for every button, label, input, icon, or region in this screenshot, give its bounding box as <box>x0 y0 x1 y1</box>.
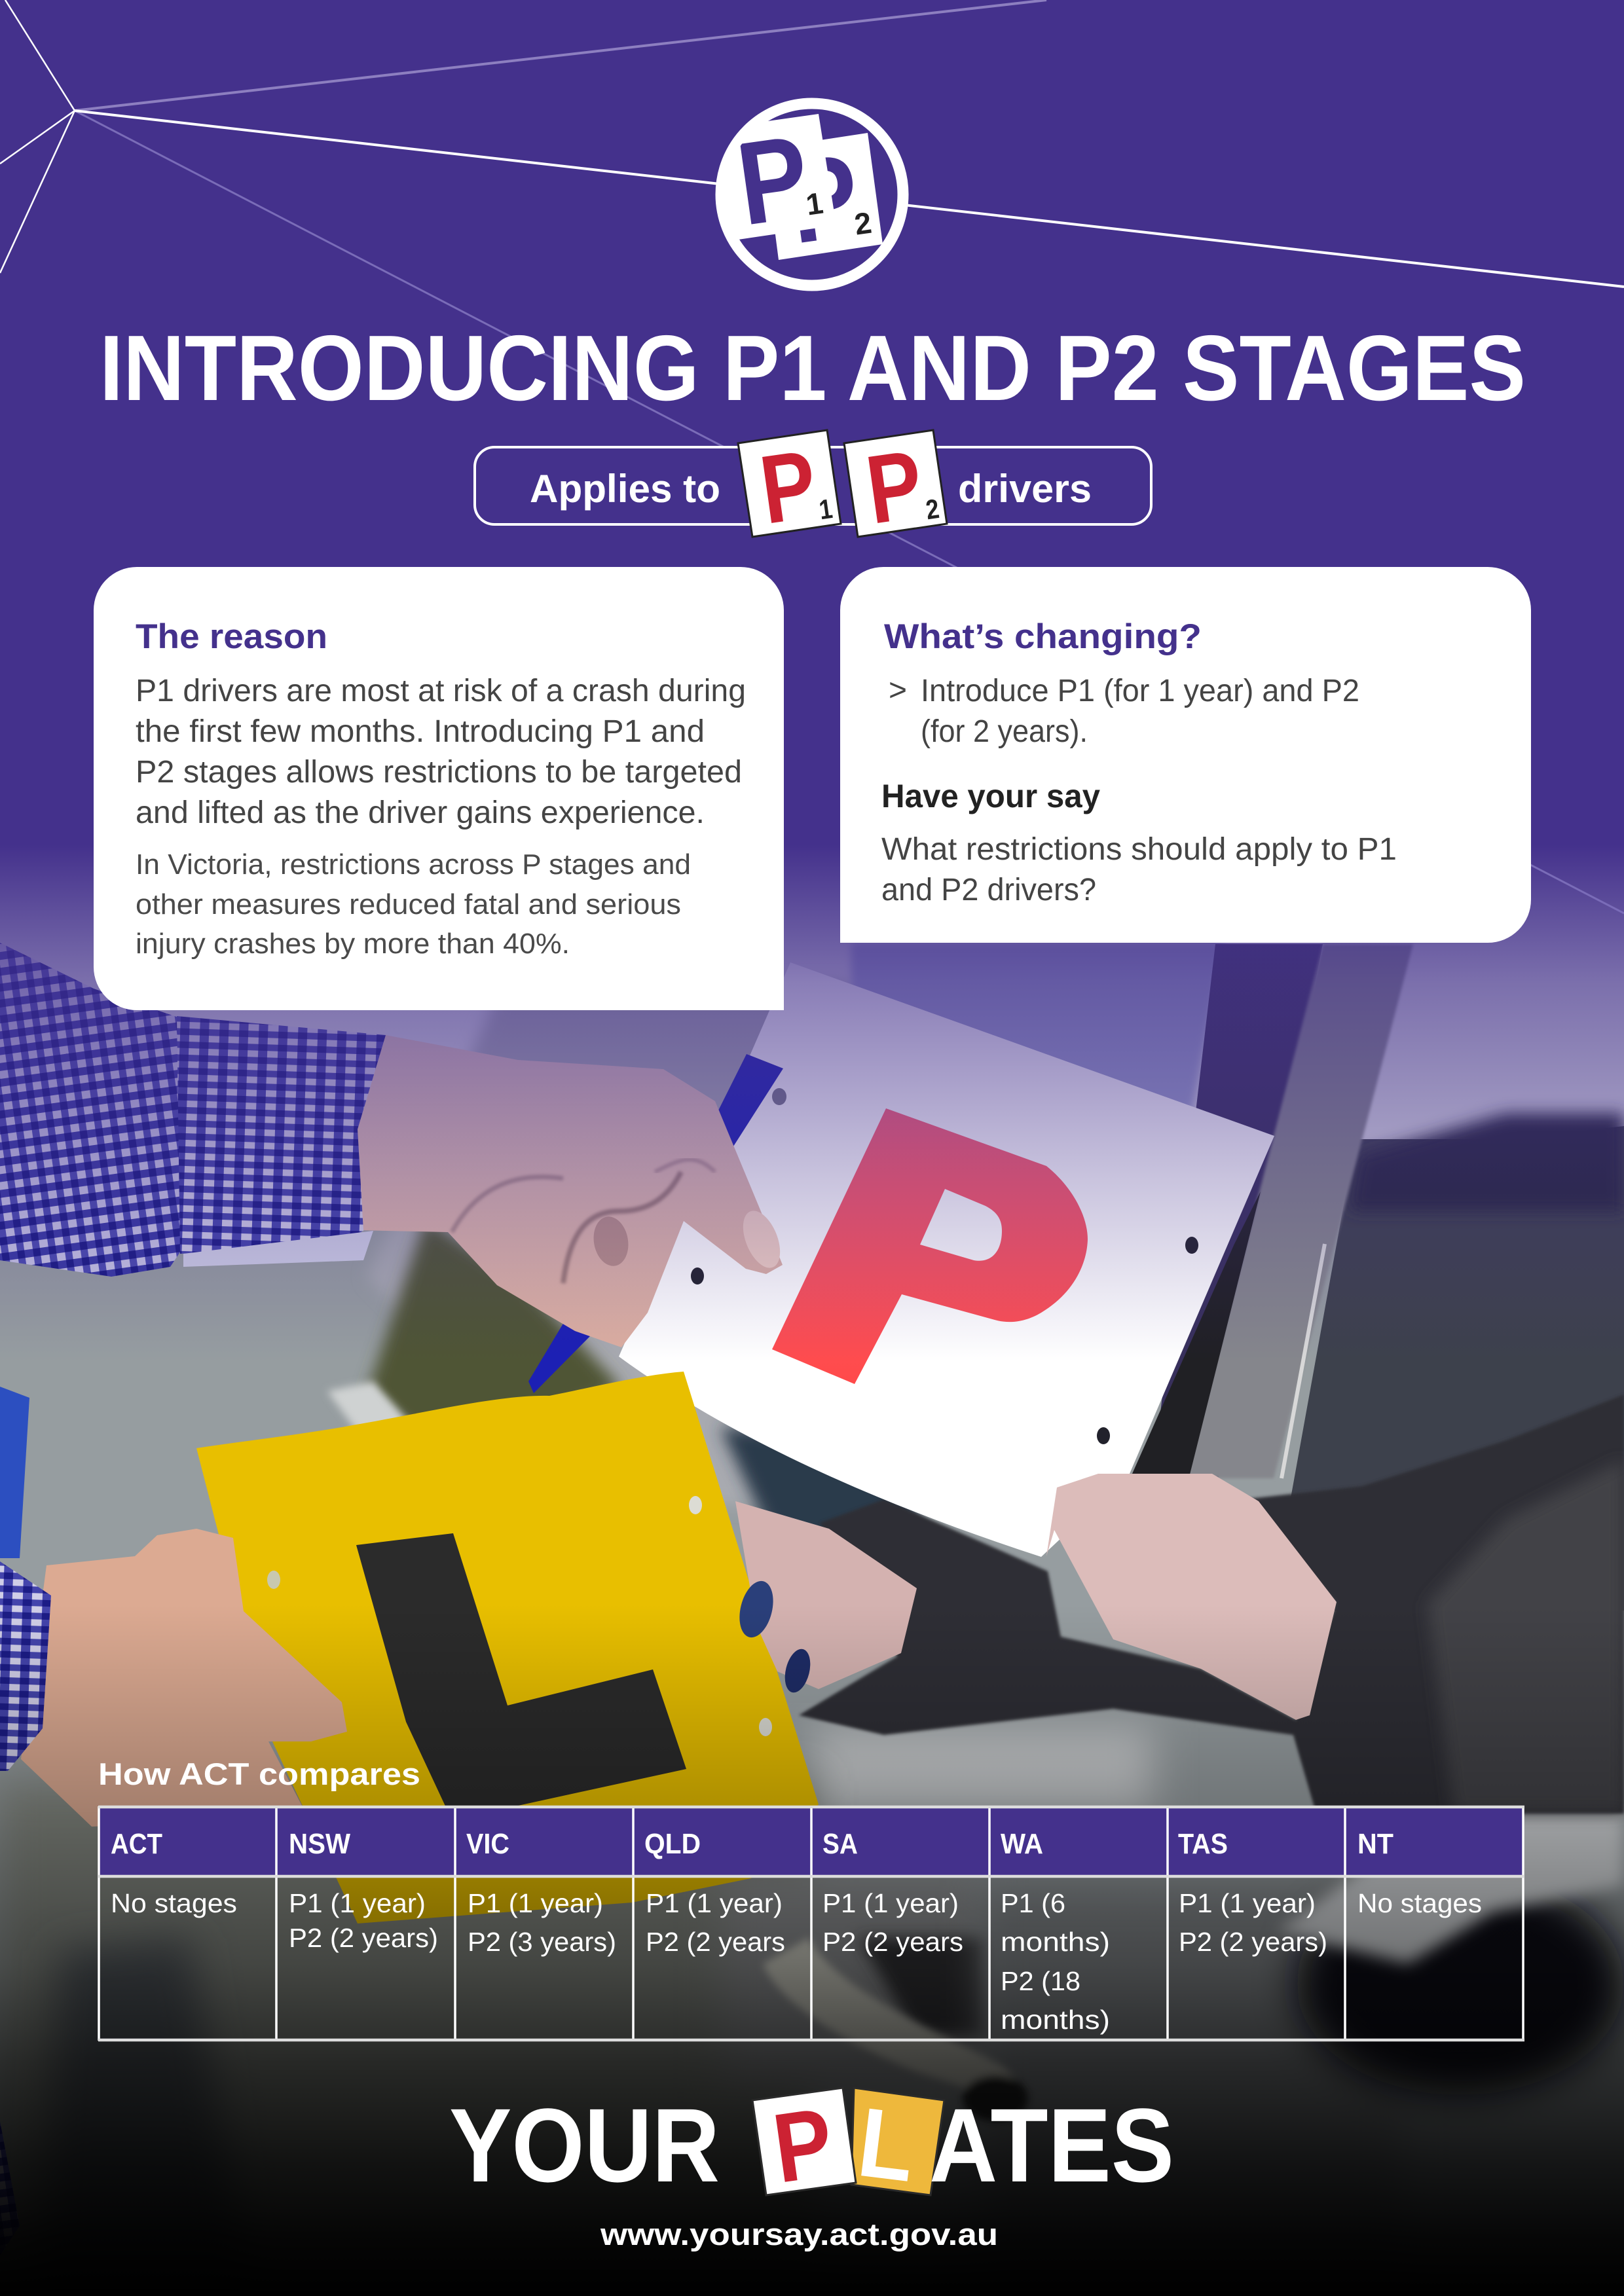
table body row: P2 (2 years) <box>1179 1927 1327 1957</box>
lower right hands <box>734 1474 1337 1720</box>
table header row: ACT <box>111 1828 162 1860</box>
text block: reason paragraph: and lifted as the driver gains experience. <box>136 795 705 830</box>
text block: change bullet <box>889 673 1359 749</box>
title: INTRODUCING P1 AND P2 STAGES <box>100 316 1526 420</box>
heading: how ACT compares: How ACT compares <box>98 1757 420 1791</box>
text block: reason paragraph: P2 stages allows restrictions to be targeted <box>136 755 742 790</box>
car interior <box>1270 1126 1624 1611</box>
purple gradient overlay <box>0 845 1624 1368</box>
website url: www.yoursay.act.gov.au <box>600 2217 998 2251</box>
text block: change bullet: Introduce P1 (for 1 year) and P2 <box>921 674 1359 708</box>
text block: question: What restrictions should apply to P1 <box>881 832 1397 867</box>
door handle <box>763 1938 1028 2121</box>
icon: P1 plate: 1 <box>817 494 834 526</box>
icon: P2 plate <box>844 429 947 544</box>
text block: reason paragraph <box>136 674 746 830</box>
text block: Victoria paragraph: In Victoria, restrictions across P stages and <box>136 848 691 881</box>
panel: what's changing <box>840 567 1531 943</box>
icon: P1 P2 circular logo <box>707 103 903 285</box>
text block: question <box>881 832 1397 907</box>
sweater <box>799 1394 1624 1813</box>
Your Plates logo: ATES <box>929 2086 1174 2204</box>
table body row: P1 (1 year) <box>1179 1888 1316 1918</box>
applies to pill: drivers <box>958 467 1092 511</box>
table body row: P2 (2 years <box>822 1927 963 1957</box>
applies to pill: Applies to <box>530 467 720 511</box>
table body row: months) <box>1001 2005 1110 2035</box>
text block: Victoria paragraph: other measures reduced fatal and serious <box>136 888 681 920</box>
table body row: No stages <box>111 1888 237 1918</box>
blue object at left edge <box>0 1387 29 1558</box>
table body row: P1 (1 year) <box>468 1888 603 1918</box>
shirt strip at lower left <box>0 2121 20 2255</box>
upper hand <box>358 1035 787 1347</box>
table body row: P1 (1 year) <box>822 1888 959 1918</box>
table header row: NSW <box>289 1828 350 1860</box>
Your Plates logo: YOUR <box>449 2086 720 2204</box>
table header row <box>111 1828 1393 1860</box>
text block: reason paragraph: P1 drivers are most at risk of a crash during <box>136 674 746 708</box>
table body row: P2 (2 years <box>646 1927 785 1957</box>
lower left hand <box>0 1529 347 1827</box>
icon: white P plate: P <box>767 2086 840 2204</box>
background photo: hands exchanging L and P plates <box>0 845 1624 2296</box>
table body row: P2 (3 years) <box>468 1927 616 1957</box>
text block: Victoria paragraph: injury crashes by more than 40%. <box>136 928 570 960</box>
icon: P1 plate: P <box>754 429 822 544</box>
pen <box>528 1054 783 1393</box>
L plate <box>196 1372 819 1923</box>
panel: the reason <box>94 567 784 1010</box>
text block: Victoria paragraph <box>136 848 691 960</box>
heading: the reason: The reason <box>136 617 327 656</box>
comparison table <box>98 1806 1524 2041</box>
icon: P1 plate <box>738 429 841 544</box>
text block: change bullet: (for 2 years). <box>921 714 1088 749</box>
table body row: P1 (6 <box>1001 1888 1065 1918</box>
Your Plates logo <box>449 2086 1174 2204</box>
P plate <box>619 962 1274 1557</box>
checked shirt sleeve <box>0 943 386 1277</box>
heading: what's changing: What’s changing? <box>884 617 1202 656</box>
applies to pill <box>475 429 1151 544</box>
icon: yellow L plate: L <box>853 2087 921 2202</box>
table body row: No stages <box>1357 1888 1482 1918</box>
icon: P1 P2 circular logo: P <box>729 110 817 250</box>
table header row: QLD <box>644 1828 701 1860</box>
text block: question: and P2 drivers? <box>881 873 1096 907</box>
text block: change bullet: > <box>889 673 907 708</box>
table header row: NT <box>1357 1828 1393 1860</box>
table header row: VIC <box>466 1828 509 1860</box>
table header row: WA <box>1001 1828 1043 1860</box>
icon: P1 P2 circular logo: P <box>780 128 867 268</box>
icon: P1 P2 circular logo: 1 <box>803 186 825 222</box>
table body row: P2 (2 years) <box>289 1923 438 1953</box>
icon: P1 P2 circular logo: 2 <box>852 206 874 242</box>
table body row: P2 (18 <box>1001 1966 1080 1996</box>
table header row: SA <box>822 1828 858 1860</box>
table body row: P1 (1 year) <box>289 1888 426 1918</box>
table body row: P1 (1 year) <box>646 1888 783 1918</box>
table header row: TAS <box>1178 1828 1228 1860</box>
table body row: months) <box>1001 1927 1110 1957</box>
icon: white P plate <box>752 2086 856 2204</box>
icon: P2 plate: P <box>860 429 929 544</box>
dark gradient overlay <box>0 1604 1624 2296</box>
table body row <box>111 1888 1482 2035</box>
star lines <box>0 0 1624 913</box>
heading: have your say: Have your say <box>881 778 1100 814</box>
icon: P2 plate: 2 <box>924 494 941 526</box>
text block: reason paragraph: the first few months. Introducing P1 and <box>136 714 705 749</box>
